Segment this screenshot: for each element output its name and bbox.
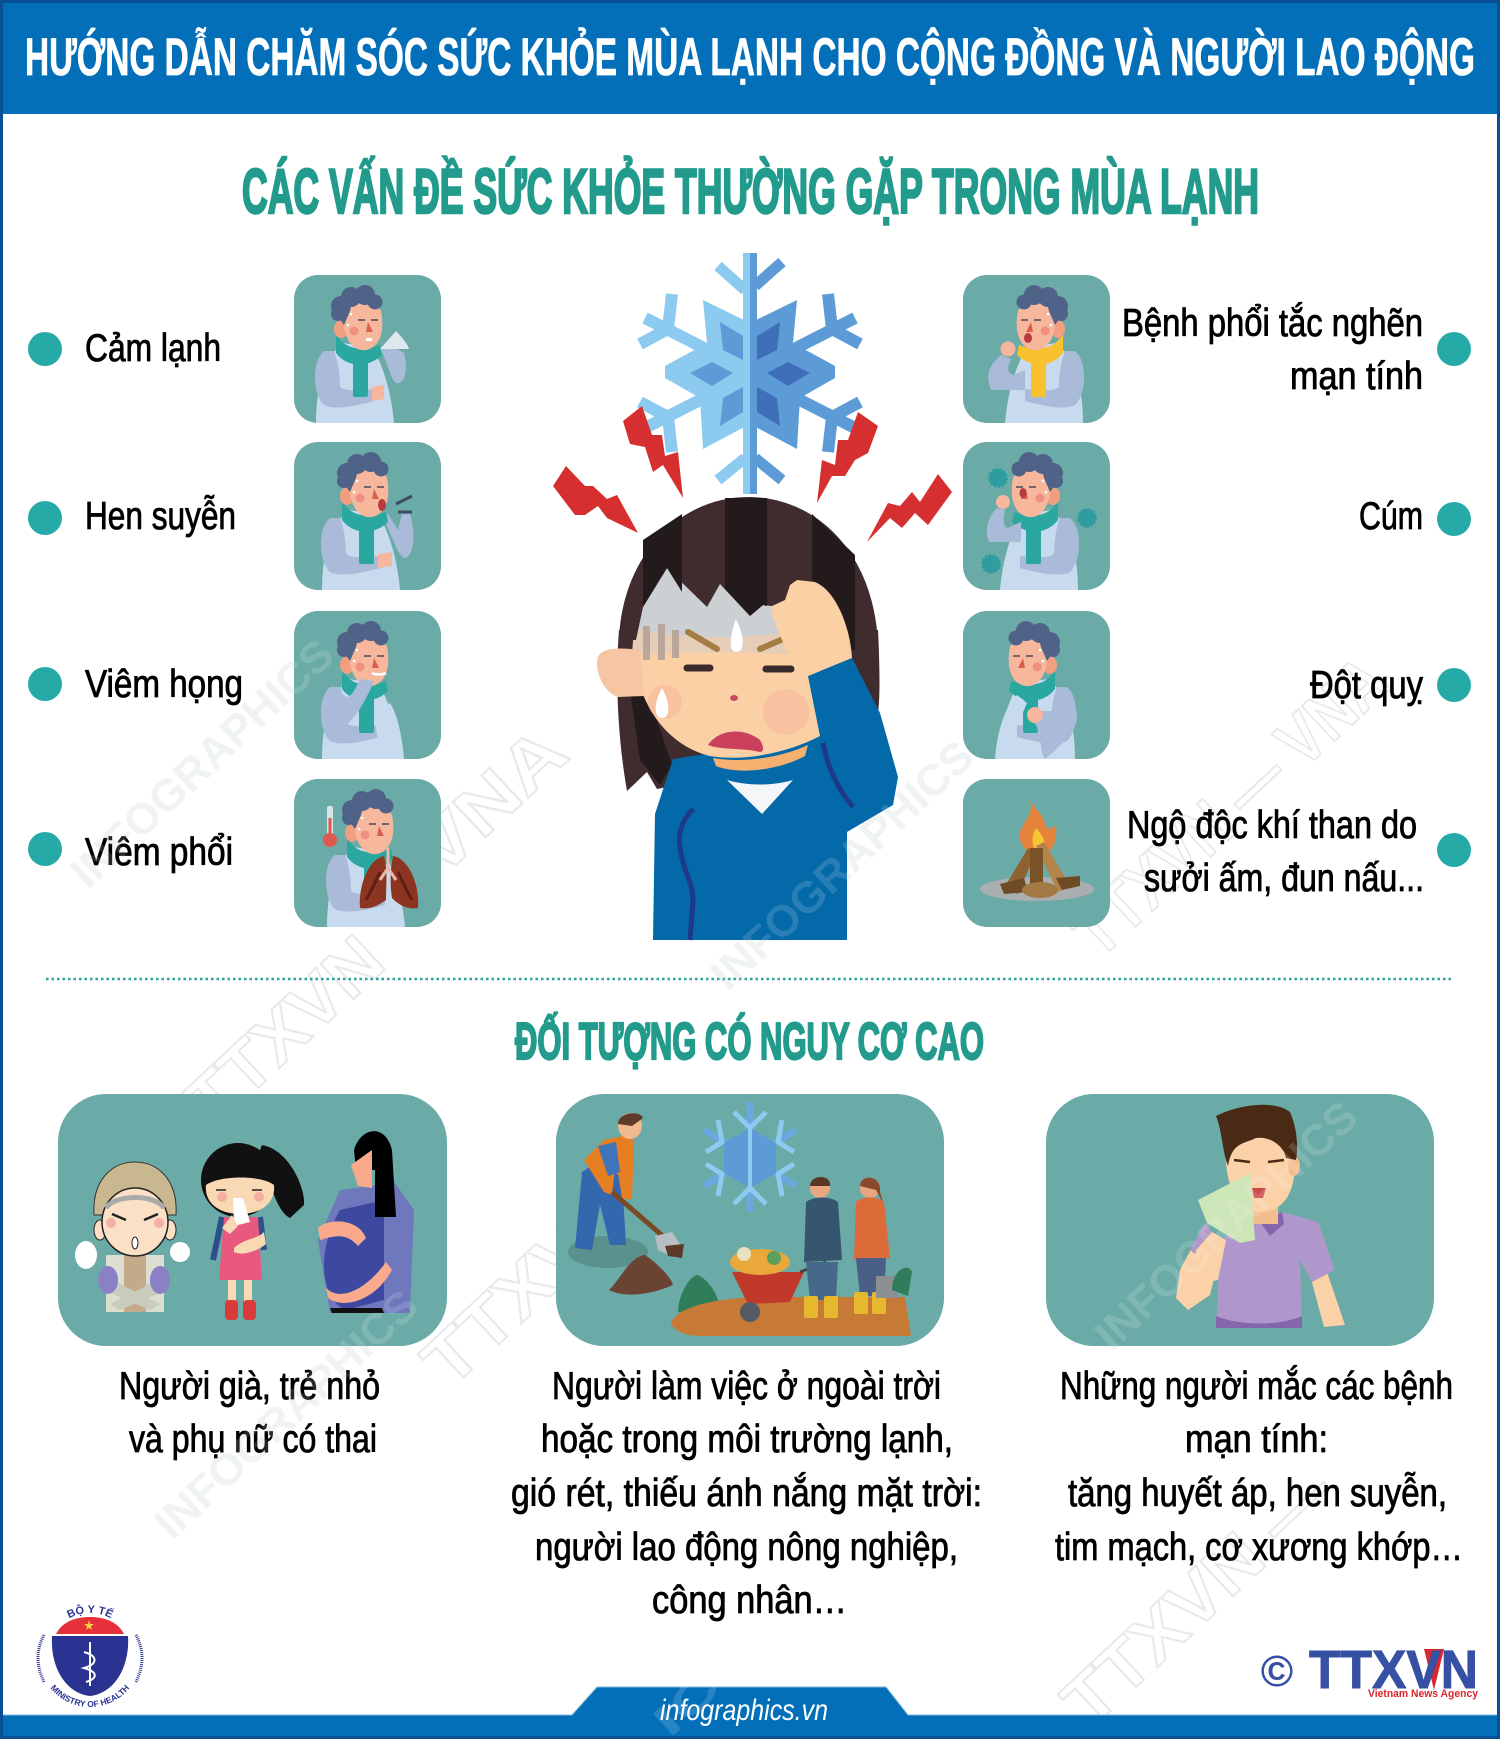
footer bar bbox=[0, 1687, 1500, 1739]
logo: ministry of health: BỘ Y TẾ bbox=[66, 1604, 114, 1618]
caption: group 1: Người già, trẻ nhỏ bbox=[119, 1365, 380, 1408]
icon: lightning bolts bbox=[553, 406, 952, 542]
caption: group 2: công nhân… bbox=[652, 1579, 847, 1622]
ear bbox=[597, 648, 644, 697]
item: viêm họng bbox=[28, 611, 441, 759]
sleeve bbox=[808, 658, 898, 832]
item: đột quỵ: Đột quỵ bbox=[1310, 664, 1423, 707]
panel: chronic disease patient bbox=[1046, 1094, 1434, 1346]
forearm bbox=[1176, 1223, 1222, 1310]
watermarks: TTXVN — VNA bbox=[1057, 641, 1403, 971]
watermark on coloured areas: INFOGRAPHICS bbox=[61, 630, 343, 897]
elderly man bbox=[75, 1162, 190, 1312]
watermark on coloured areas: INFOGRAPHICS bbox=[145, 1281, 427, 1548]
neck and face bbox=[1252, 1200, 1278, 1224]
forehead shade bbox=[634, 565, 805, 653]
caption: group 1: và phụ nữ có thai bbox=[129, 1418, 377, 1461]
watermarks: INFOGRAPHICS bbox=[1085, 1092, 1367, 1359]
icon: snowflake bbox=[640, 253, 860, 494]
footer url: infographics.vn bbox=[660, 1694, 828, 1727]
header banner bbox=[0, 0, 1500, 114]
divider bbox=[46, 978, 1454, 980]
watermarks: VNA bbox=[397, 711, 582, 891]
item: cảm lạnh: Cảm lạnh bbox=[85, 327, 221, 370]
icon: lungs bbox=[360, 848, 418, 908]
hair back bbox=[617, 630, 880, 791]
caption: group 1 bbox=[119, 1365, 380, 1461]
pregnant woman bbox=[318, 1131, 414, 1313]
caption: group 2: Người làm việc ở ngoài trời bbox=[552, 1365, 941, 1408]
item: ngộ độc khí than: sưởi ấm, đun nấu... bbox=[1144, 857, 1424, 900]
icon: campfire bbox=[980, 800, 1094, 901]
digging worker bbox=[568, 1113, 684, 1268]
icon: thermometer bbox=[323, 806, 337, 847]
collar bbox=[727, 780, 793, 814]
item: COPD: Bệnh phổi tắc nghẽn bbox=[1122, 302, 1423, 345]
item: đột quỵ bbox=[963, 611, 1471, 759]
heading: high risk groups: ĐỐI TƯỢNG CÓ NGUY CƠ CAO bbox=[515, 1012, 984, 1071]
logo: ministry of health: MINISTRY OF HEALTH bbox=[50, 1684, 130, 1707]
item: COPD bbox=[963, 275, 1471, 423]
face bbox=[633, 555, 820, 758]
caption: group 2 bbox=[511, 1365, 982, 1622]
item: ngộ độc khí than: Ngộ độc khí than do bbox=[1127, 804, 1417, 847]
watermarks: INFOGRAPHICS bbox=[61, 630, 343, 897]
logo: TTXVN: TTXVN bbox=[1309, 1640, 1478, 1700]
item: hen suyễn: Hen suyễn bbox=[85, 495, 236, 538]
ground bbox=[671, 1297, 911, 1336]
item: hen suyễn bbox=[28, 442, 441, 590]
caption: group 2: người lao động nông nghiệp, bbox=[535, 1526, 958, 1569]
item: ngộ độc khí than bbox=[963, 779, 1471, 927]
caption: group 2: hoặc trong môi trường lạnh, bbox=[541, 1418, 953, 1461]
left column: illnesses bbox=[28, 275, 441, 927]
forehead lines bbox=[643, 624, 679, 660]
text: group captions bbox=[119, 1365, 1463, 1622]
sweater body bbox=[653, 736, 850, 940]
watermarks: TTXVN — bbox=[1047, 1452, 1349, 1739]
small snowflake bbox=[704, 1102, 796, 1212]
watermarks: TTXVN bbox=[170, 920, 399, 1141]
hair front bbox=[619, 497, 878, 640]
dirt mound and bush bbox=[609, 1255, 719, 1315]
logo: TTXVN: © bbox=[1261, 1647, 1293, 1696]
logo: TTXVN: Vietnam News Agency bbox=[1368, 1688, 1479, 1700]
panel: outdoor workers bbox=[556, 1094, 944, 1346]
item: viêm phổi: Viêm phổi bbox=[85, 831, 233, 874]
watermarks: TTXVN bbox=[407, 1167, 650, 1401]
caption: group 2: gió rét, thiếu ánh nắng mặt trời: bbox=[511, 1472, 982, 1515]
logo: ministry of health bbox=[36, 1604, 144, 1707]
caption: group 3 bbox=[1055, 1365, 1463, 1569]
wheelbarrow bbox=[730, 1247, 826, 1322]
two farmers bbox=[804, 1177, 912, 1318]
item: COPD: mạn tính bbox=[1290, 355, 1423, 398]
caption: group 3: mạn tính: bbox=[1185, 1418, 1328, 1461]
watermarks: INFOGRAPHICS bbox=[701, 732, 983, 999]
panel: elderly, children, pregnant bbox=[58, 1094, 447, 1346]
item: cúm bbox=[963, 442, 1471, 590]
item: viêm họng: Viêm họng bbox=[85, 663, 243, 706]
eyes, brows, mouth bbox=[688, 632, 783, 649]
central illustration: woman with headache under snowflake bbox=[553, 253, 952, 940]
right column: illnesses bbox=[963, 275, 1471, 927]
item: cúm: Cúm bbox=[1359, 495, 1423, 538]
girl bbox=[201, 1143, 304, 1320]
watermark on coloured areas bbox=[61, 630, 1367, 1739]
hair bbox=[1216, 1105, 1297, 1166]
tissue bbox=[1198, 1173, 1255, 1243]
watermarks bbox=[61, 630, 1403, 1739]
watermarks: INFOGRAPHICS bbox=[145, 1281, 427, 1548]
item: viêm phổi bbox=[28, 779, 441, 927]
watermark on coloured areas: INFOGRAPHICS bbox=[701, 732, 983, 999]
arm right bbox=[1310, 1272, 1345, 1327]
item: cảm lạnh bbox=[28, 275, 441, 423]
hand bbox=[770, 580, 852, 676]
shirt bbox=[1216, 1212, 1335, 1328]
watermark on coloured areas: INFOGRAPHICS bbox=[1085, 1092, 1367, 1359]
